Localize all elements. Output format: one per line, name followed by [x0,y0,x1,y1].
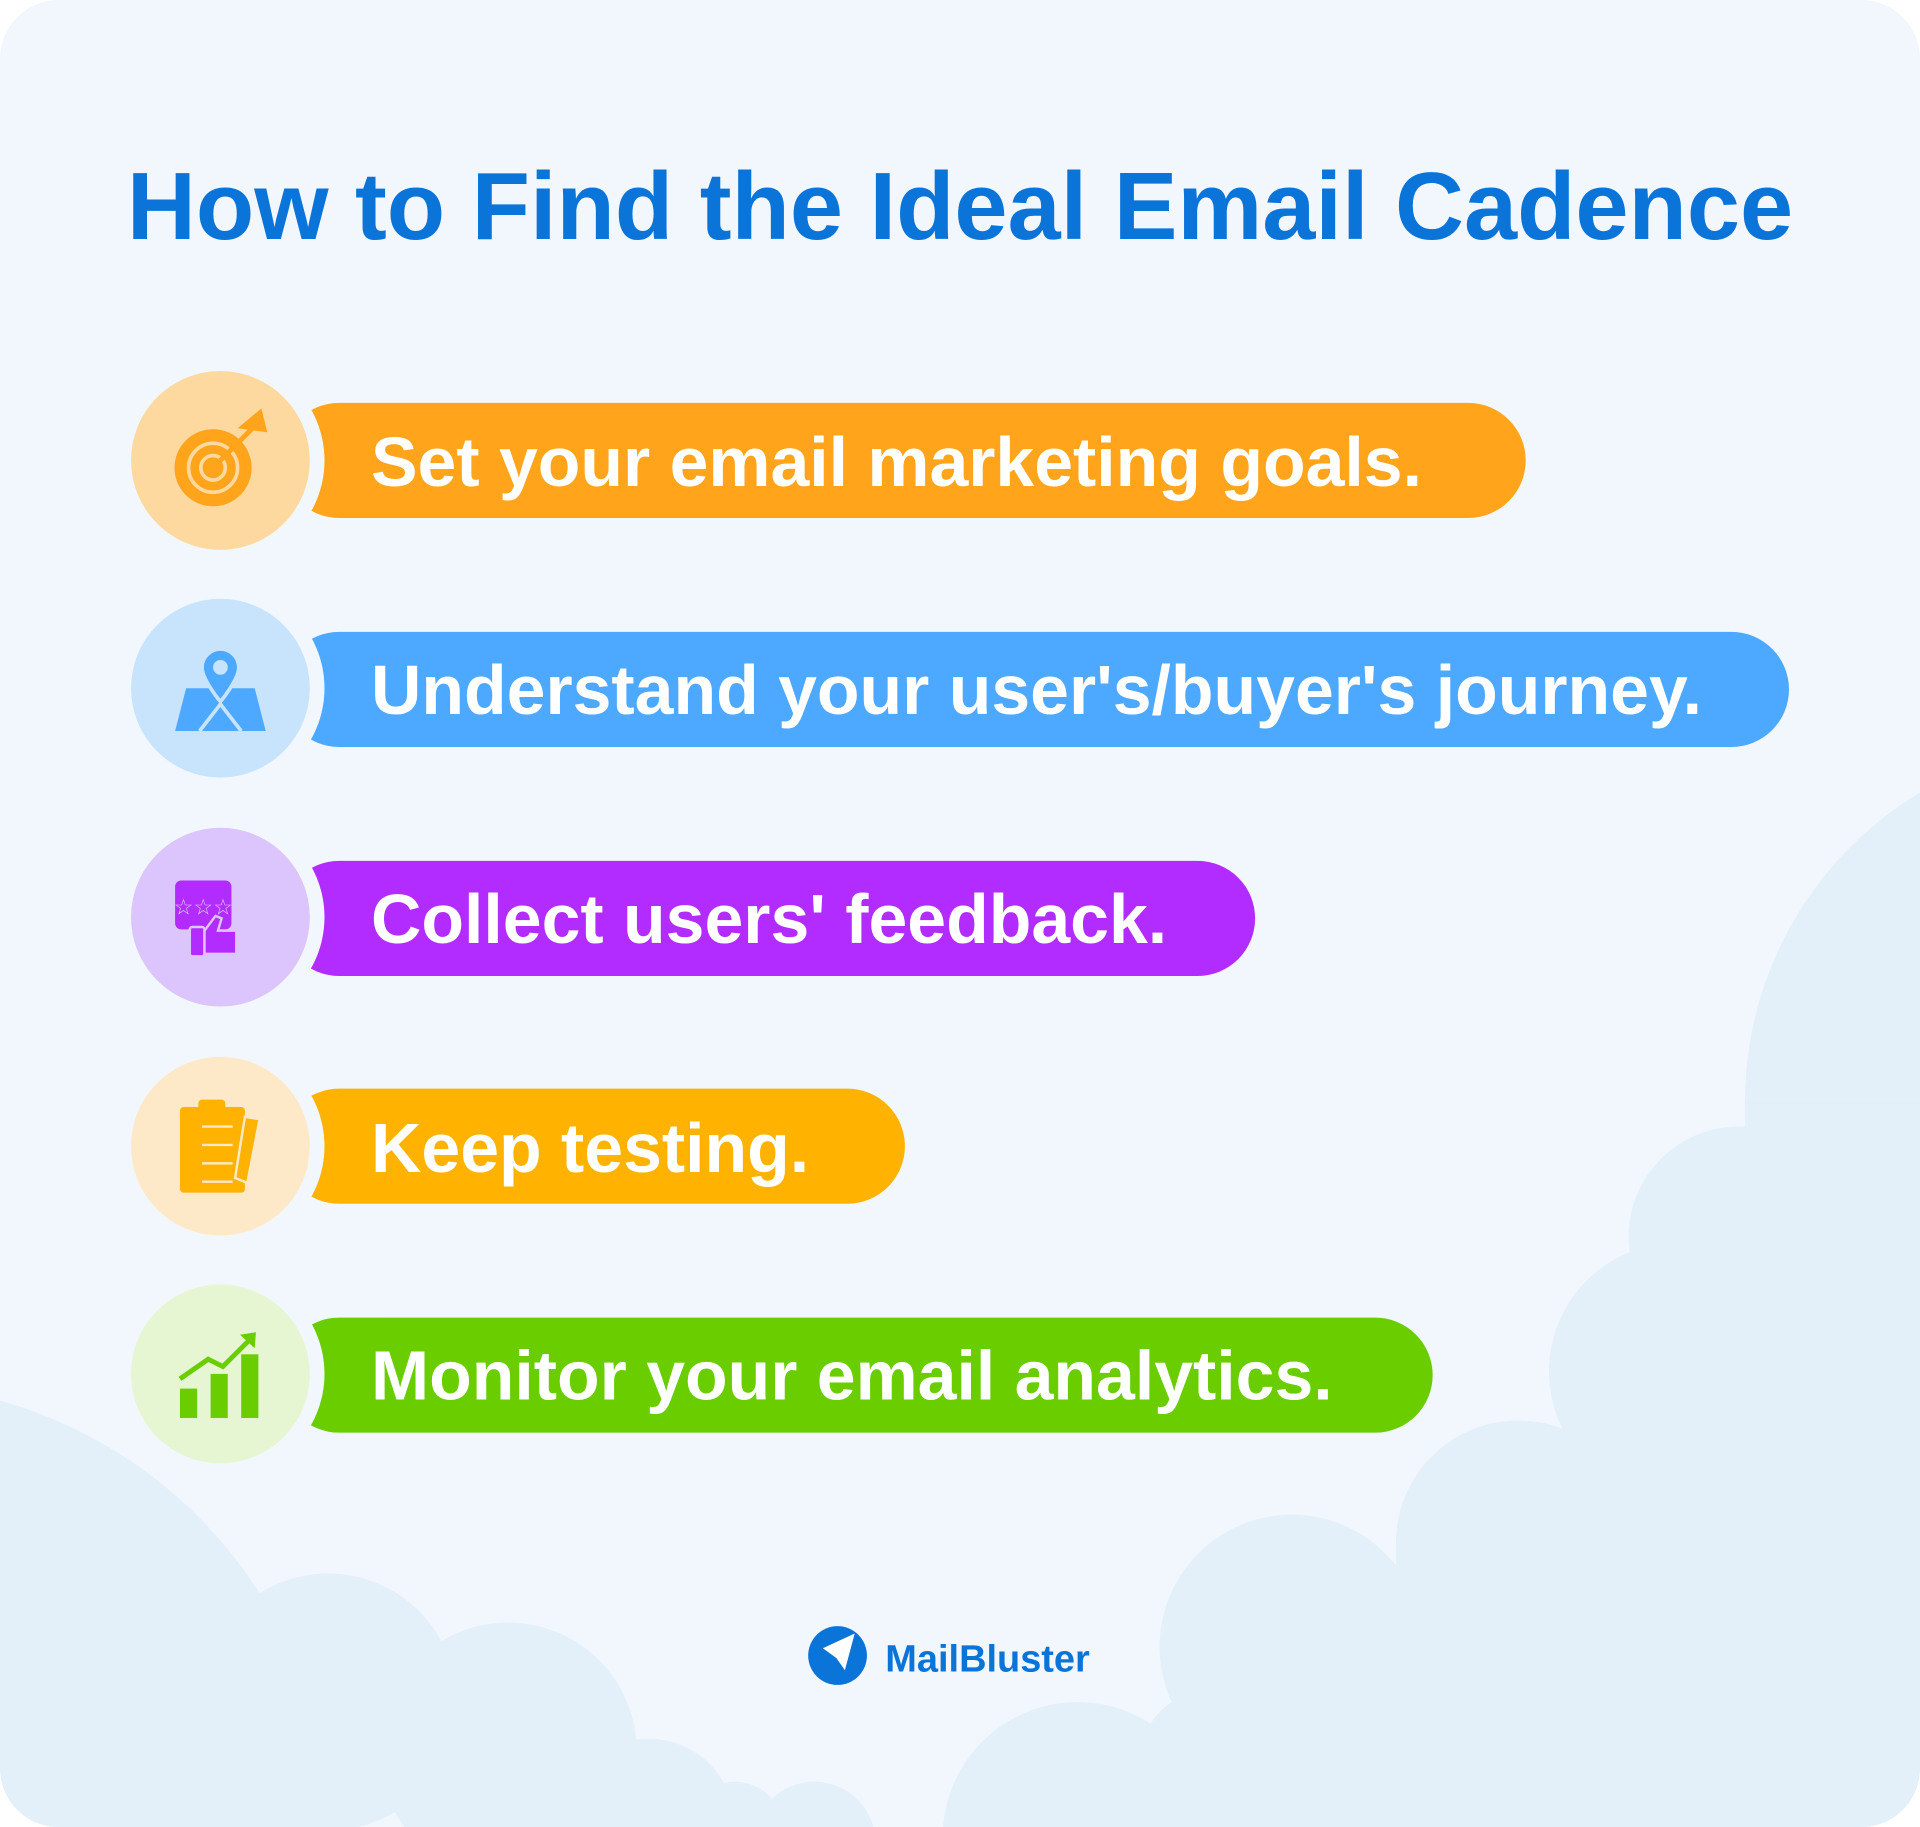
row 2 [116,584,1789,792]
row 4: Keep testing. [371,1109,809,1187]
logo: MailBluster [808,1626,1090,1685]
icon: feedback: ☆☆☆ [174,895,233,920]
row 3 [116,813,1255,1021]
icon: chart [180,1332,258,1418]
title: How to Find the Ideal Email Cadence [127,154,1793,260]
icon: feedback [174,880,236,956]
row 5: Monitor your email analytics. [371,1337,1333,1415]
logo: MailBluster: MailBluster [885,1638,1090,1680]
row 2: Understand your user's/buyer's journey. [371,651,1702,729]
icon: checklist [180,1100,260,1193]
row 5 [116,1270,1433,1478]
row 3: Collect users' feedback. [371,880,1167,958]
row 4 [116,1042,905,1250]
icon: target [178,414,263,503]
row 1: Set your email marketing goals. [371,423,1422,501]
icon: map pin [175,649,266,731]
row 1 [116,356,1526,565]
